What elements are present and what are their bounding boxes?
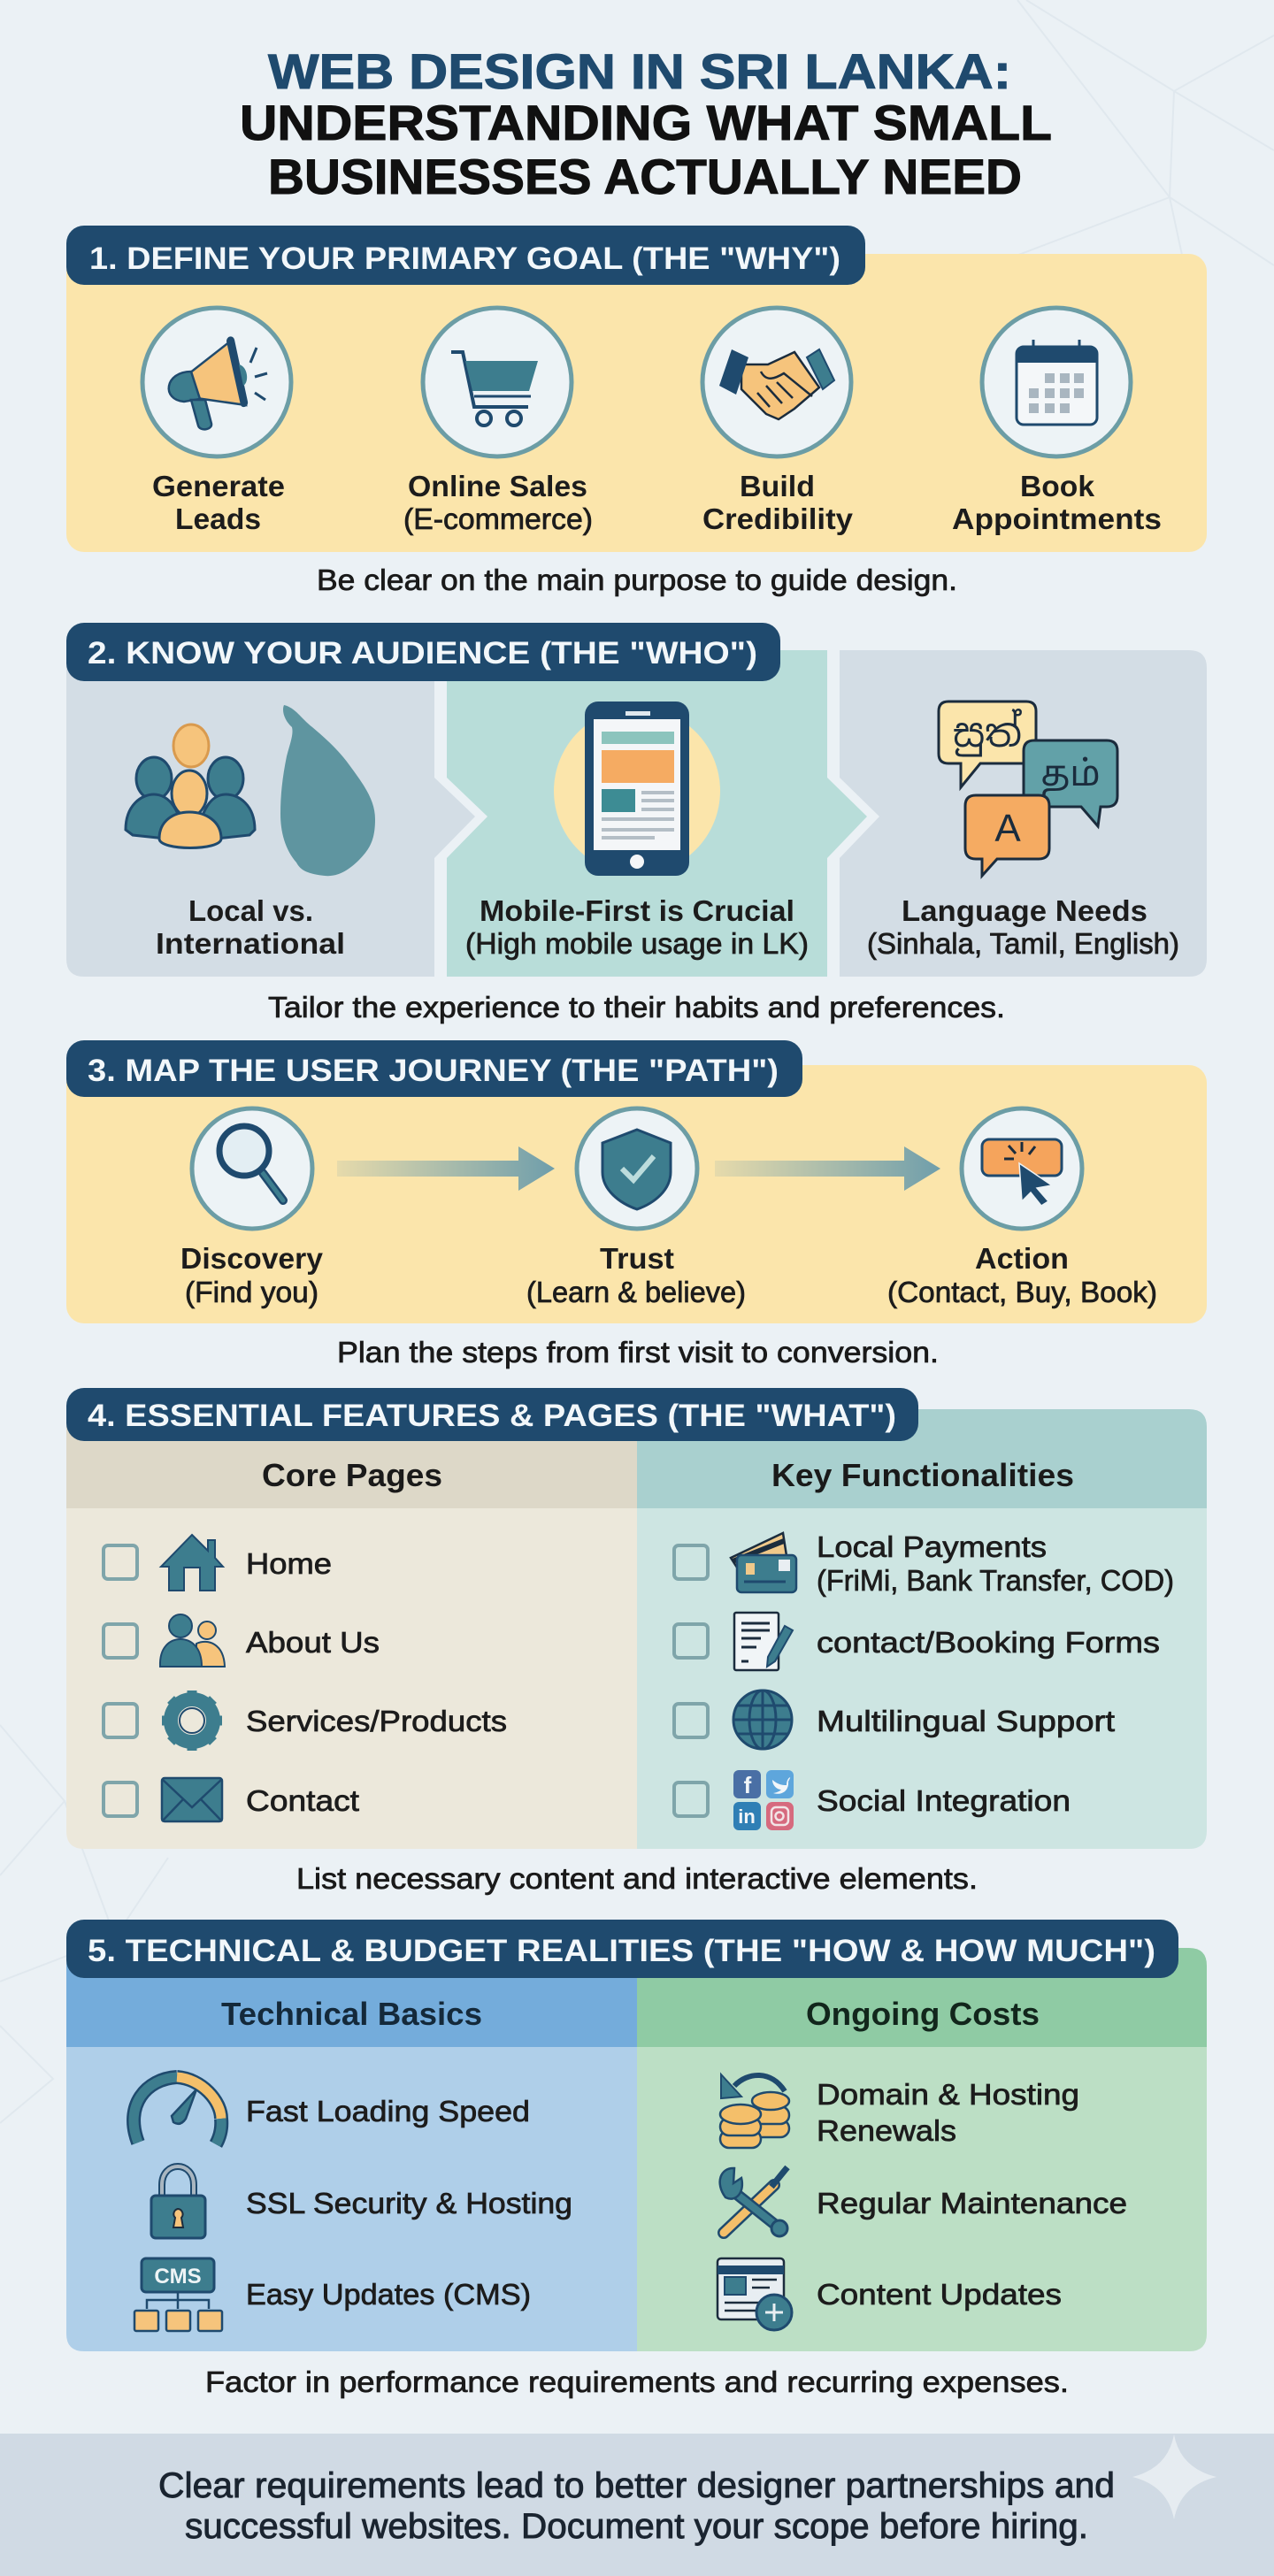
feature list text: (FriMi, Bank Transfer, COD)	[817, 1564, 1174, 1597]
feature list text: Services/Products	[246, 1705, 507, 1737]
caption: section 4: List necessary content and interactive elements.	[296, 1862, 978, 1895]
panel: section 4 features	[66, 1388, 1207, 1849]
feature list text: Social Integration	[817, 1784, 1071, 1817]
panel: section 5 technical and budget	[66, 1920, 1207, 2351]
mobile label: (High mobile usage in LK)	[465, 927, 809, 960]
goal labels: Build	[740, 470, 815, 502]
panel: section 3 user journey	[66, 1040, 1207, 1323]
icon: about us people	[160, 1614, 225, 1667]
section 2 header	[66, 623, 780, 681]
feature list text: About Us	[246, 1626, 380, 1659]
feature list text: contact/Booking Forms	[817, 1626, 1160, 1659]
icon: form and pen	[734, 1613, 793, 1670]
caption: section 5: Factor in performance requirements and recurring expenses.	[205, 2365, 1069, 2398]
technical and cost list text: Easy Updates (CMS)	[246, 2278, 531, 2311]
technical and cost list text	[246, 2078, 1127, 2311]
icon: speed gauge	[134, 2077, 221, 2144]
section 4 header: 4. ESSENTIAL FEATURES & PAGES (THE "WHAT")	[88, 1399, 896, 1433]
icon: social media tiles	[733, 1770, 794, 1830]
arrow: trust to action	[715, 1146, 940, 1191]
technical and cost list text: Content Updates	[817, 2278, 1062, 2311]
caption: section 3: Plan the steps from first visit to conversion.	[337, 1336, 939, 1368]
column heading: ongoing costs: Ongoing Costs	[806, 1996, 1040, 2032]
caption: section 1: Be clear on the main purpose to guide design.	[317, 564, 957, 596]
icon: language bubbles: A	[994, 807, 1021, 850]
caption: section 2: Tailor the experience to their habits and preferences.	[268, 991, 1005, 1024]
language label	[867, 894, 1179, 960]
checkboxes	[104, 1545, 708, 1816]
technical and cost list text: Domain & Hosting	[817, 2078, 1079, 2111]
arrow: discovery to trust	[337, 1146, 555, 1191]
goal labels: Generate	[152, 470, 285, 502]
icon: sparkle	[1132, 2434, 1216, 2519]
mobile label: Mobile-First is Crucial	[480, 894, 794, 927]
icon: gear	[162, 1690, 222, 1751]
icon: megaphone	[142, 308, 291, 456]
icon: magnifier	[192, 1108, 312, 1229]
icon: envelope	[162, 1778, 222, 1821]
panel: section 1 goals	[66, 226, 1207, 552]
technical and cost list text: Renewals	[817, 2114, 956, 2147]
section 2 header: 2. KNOW YOUR AUDIENCE (THE "WHO")	[88, 636, 757, 671]
column heading: key functionalities: Key Functionalities	[771, 1457, 1074, 1493]
feature list text	[246, 1530, 1174, 1817]
section 1 header: 1. DEFINE YOUR PRIMARY GOAL (THE "WHY")	[89, 242, 840, 276]
icon: handshake	[702, 308, 851, 456]
local label: International	[156, 927, 345, 960]
icon: smartphone	[554, 702, 720, 876]
goal labels: (E-commerce)	[403, 502, 593, 535]
goal labels: Leads	[175, 502, 261, 535]
icon: people	[126, 724, 255, 847]
icon: language bubbles: தம்	[1040, 755, 1101, 799]
language label: Language Needs	[902, 894, 1147, 927]
journey labels: Trust	[600, 1242, 674, 1275]
icon: CMS hierarchy: CMS	[154, 2265, 202, 2288]
audience card: local vs international	[66, 650, 475, 977]
language label: (Sinhala, Tamil, English)	[867, 927, 1179, 960]
icon: globe	[733, 1690, 792, 1749]
section 3 header: 3. MAP THE USER JOURNEY (THE "PATH")	[88, 1054, 779, 1088]
icon: shield	[577, 1108, 697, 1229]
mobile label	[465, 894, 809, 960]
footer banner	[0, 2434, 1274, 2576]
journey labels	[180, 1242, 1157, 1308]
audience card: mobile first	[447, 650, 867, 977]
goal labels: Appointments	[952, 502, 1162, 535]
feature list text: Multilingual Support	[817, 1705, 1115, 1737]
local label: Local vs.	[188, 894, 313, 927]
journey labels: (Learn & believe)	[526, 1276, 746, 1308]
panel: section 2 audience	[66, 623, 1207, 977]
icon: padlock	[151, 2166, 205, 2238]
icon: social media tiles: in	[738, 1806, 756, 1828]
icon: language bubbles	[939, 702, 1117, 876]
icon: language bubbles: සුත්	[953, 708, 1022, 758]
technical and cost list text: Regular Maintenance	[817, 2187, 1127, 2220]
goal labels: Online Sales	[408, 470, 587, 502]
section 1 header	[66, 226, 865, 285]
section 3 header	[66, 1040, 802, 1097]
column heading: core pages: Core Pages	[262, 1457, 442, 1493]
journey labels: Discovery	[180, 1242, 324, 1275]
icon: home	[161, 1535, 223, 1591]
title: BUSINESSES ACTUALLY NEED	[268, 149, 1022, 204]
icon: social media tiles: f	[744, 1772, 752, 1798]
footer banner: Clear requirements lead to better designer partnerships and	[158, 2466, 1115, 2505]
icon: calendar	[982, 308, 1131, 456]
icon: payment cards	[731, 1533, 796, 1592]
icon: coins and renewal arrow	[720, 2074, 789, 2148]
journey labels: (Find you)	[185, 1276, 318, 1308]
goal labels: Credibility	[702, 502, 854, 535]
icon: content page with plus	[718, 2258, 792, 2330]
section 5 header: 5. TECHNICAL & BUDGET REALITIES (THE "HOW & HOW MUCH")	[88, 1934, 1155, 1968]
icon: CMS hierarchy	[134, 2258, 222, 2331]
icon: click button	[962, 1108, 1082, 1229]
icon: wrench and screwdriver	[720, 2167, 787, 2236]
title: UNDERSTANDING WHAT SMALL	[240, 95, 1052, 150]
title	[240, 43, 1052, 204]
feature list text: Local Payments	[817, 1530, 1047, 1563]
journey labels: Action	[975, 1242, 1069, 1275]
technical and cost list text: Fast Loading Speed	[246, 2095, 530, 2128]
section 4 header	[66, 1388, 918, 1441]
technical and cost list text: SSL Security & Hosting	[246, 2187, 572, 2220]
feature list text: Contact	[246, 1784, 359, 1817]
section 5 header	[66, 1920, 1178, 1978]
goal labels	[152, 470, 1162, 535]
goal labels: Book	[1020, 470, 1095, 502]
journey labels: (Contact, Buy, Book)	[887, 1276, 1157, 1308]
feature list text: Home	[246, 1547, 332, 1580]
column heading: technical basics: Technical Basics	[221, 1996, 482, 2032]
icon: Sri Lanka map	[280, 705, 375, 876]
local label	[156, 894, 345, 960]
audience card: language needs	[840, 650, 1207, 977]
footer banner: successful websites. Document your scope before hiring.	[185, 2507, 1088, 2546]
icon: shopping cart	[423, 308, 572, 456]
title: WEB DESIGN IN SRI LANKA:	[268, 43, 1011, 99]
